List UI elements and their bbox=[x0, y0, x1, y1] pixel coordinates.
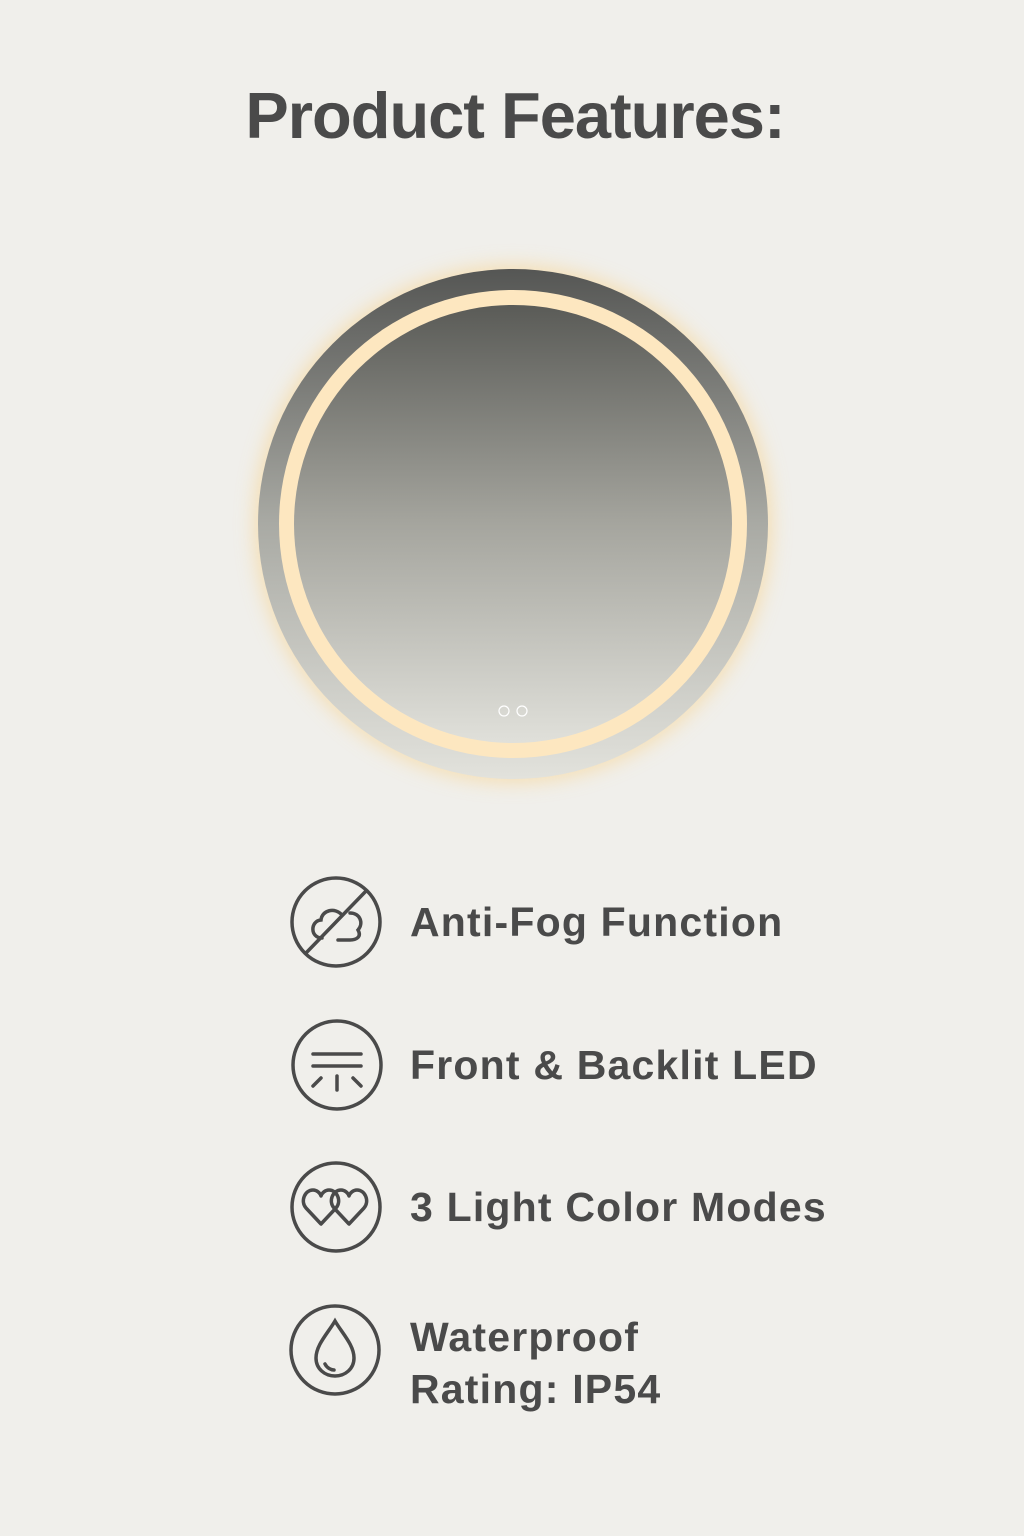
icon: hearts bbox=[290, 1161, 382, 1253]
icon: no fog bbox=[290, 876, 382, 968]
feature: LED bbox=[291, 1019, 818, 1111]
label: Front & Backlit LED bbox=[410, 1042, 818, 1088]
label: Waterproof bbox=[410, 1314, 639, 1360]
mirror bbox=[244, 256, 782, 792]
label: Anti-Fog Function bbox=[410, 899, 783, 945]
label: Rating: IP54 bbox=[410, 1366, 661, 1412]
icon: light bbox=[291, 1019, 383, 1111]
feature: color modes bbox=[290, 1161, 827, 1253]
feature: waterproof bbox=[289, 1304, 661, 1412]
feature: anti-fog bbox=[290, 876, 783, 968]
label: 3 Light Color Modes bbox=[410, 1184, 827, 1230]
icon: drop bbox=[289, 1304, 381, 1396]
touch buttons bbox=[499, 706, 527, 716]
label bbox=[410, 1314, 661, 1412]
title: Product Features: bbox=[245, 79, 785, 152]
